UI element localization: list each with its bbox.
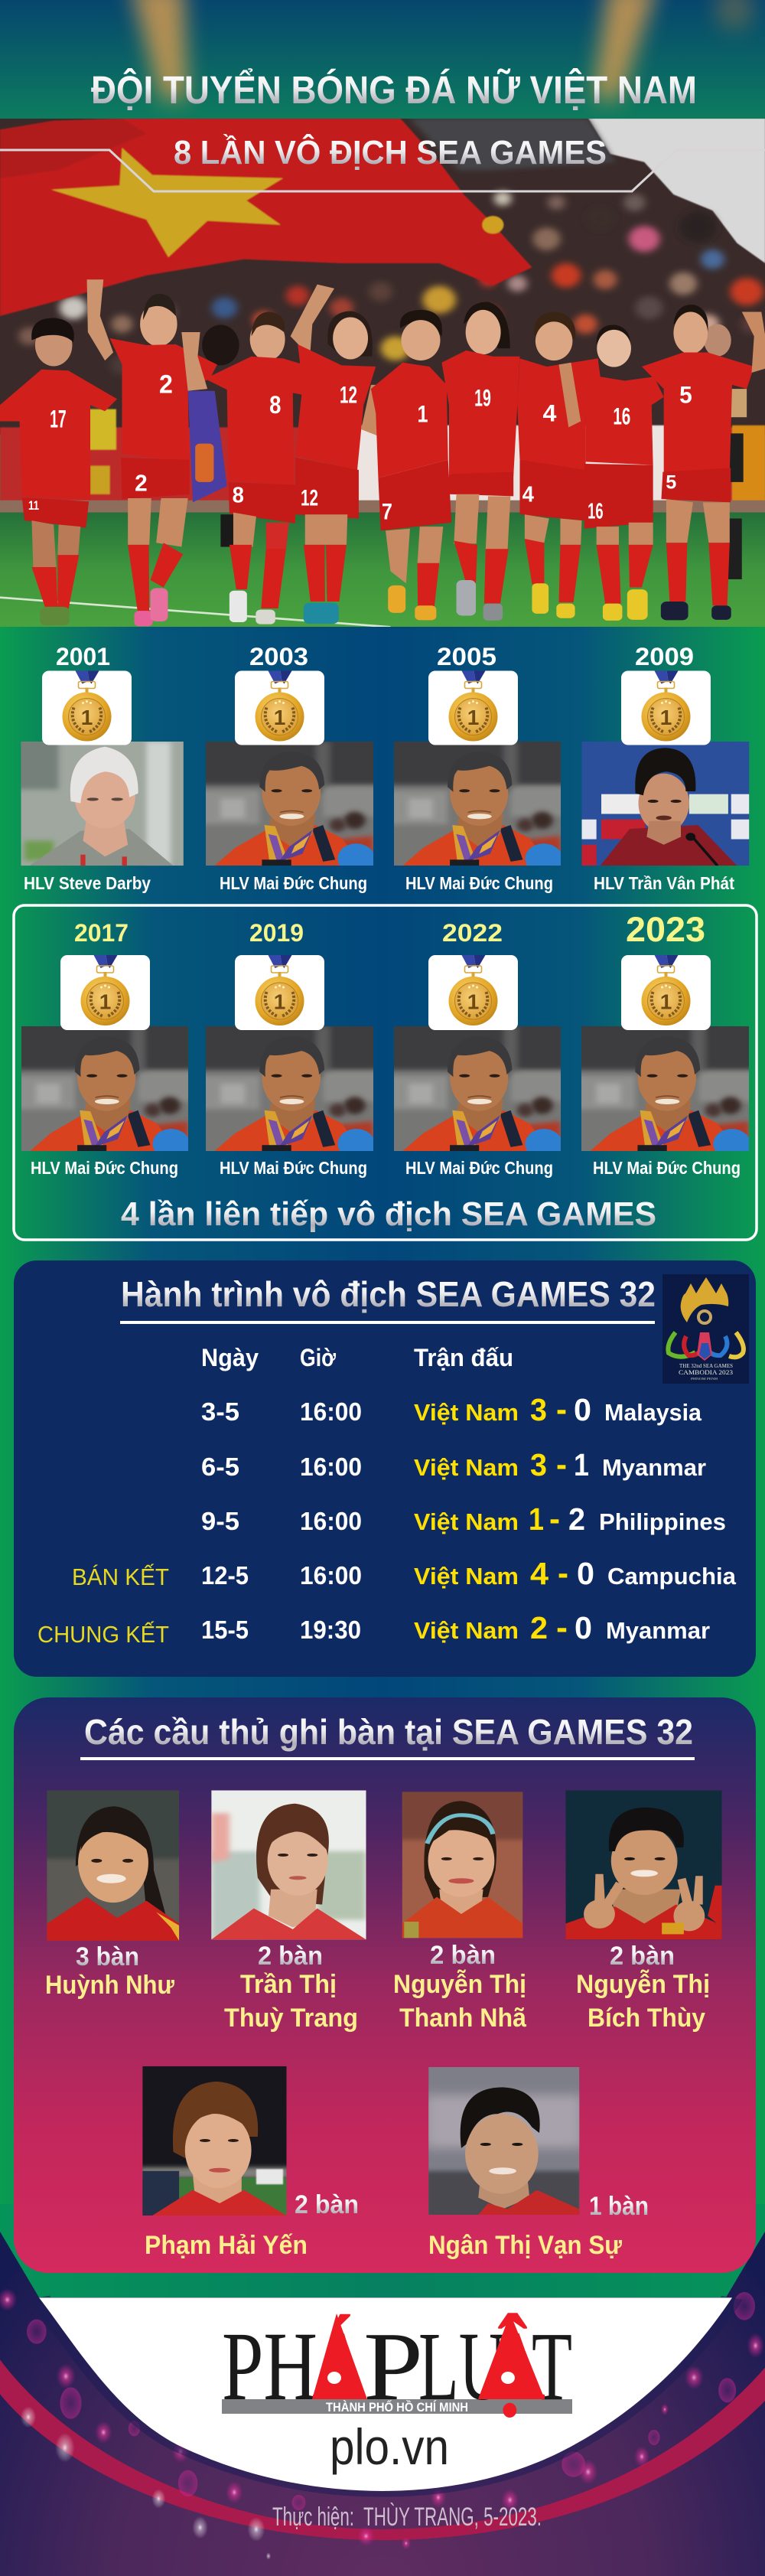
- column headers: [201, 1344, 513, 1371]
- column headers: Giờ: [300, 1344, 336, 1371]
- logo: Phap Luat: [222, 2311, 572, 2421]
- scorer: Nguyen Thi Thanh Nha: [393, 1941, 526, 2033]
- match row 3: 2: [568, 1502, 585, 1537]
- coach photo 2017: [11, 1019, 198, 1159]
- scorer: Ngan Thi Van Su: Ngân Thị Vạn Sự: [428, 2231, 622, 2260]
- match row 1: 3: [530, 1392, 547, 1427]
- coach photo 2022: [384, 1019, 571, 1159]
- caption Mai Duc Chung: HLV Mai Đức Chung: [220, 873, 367, 893]
- year 2003: 2003: [249, 643, 308, 670]
- website: plo.vn: [330, 2418, 449, 2475]
- column headers: Trận đấu: [414, 1344, 513, 1371]
- logo: Phap Luat: P: [363, 2312, 423, 2421]
- footer artwork: [0, 2288, 765, 2560]
- match row 4: semi-final: 0: [577, 1556, 594, 1591]
- scorer: Nguyen Thi Thanh Nha: Nguyễn Thị: [393, 1970, 526, 1999]
- match row 3: -: [549, 1500, 560, 1537]
- year 2009: 2009: [635, 643, 694, 670]
- player 2: [87, 279, 217, 626]
- medal card 2023: 1: [660, 990, 672, 1013]
- scorer: Nguyen Thi Bich Thuy: Nguyễn Thị: [576, 1970, 710, 1999]
- player 12: 12: [301, 484, 318, 510]
- caption 2017: HLV Mai Đức Chung: [31, 1158, 178, 1178]
- section: coaches and titles 2001-2009: [15, 643, 749, 893]
- logo: Phap Luat: LU: [418, 2312, 506, 2421]
- year 2005: 2005: [437, 643, 496, 670]
- medal card 2005: [428, 670, 518, 745]
- scorer: Nguyen Thi Thanh Nha: Thanh Nhã: [399, 2004, 526, 2033]
- player 5: 5: [666, 471, 676, 493]
- Vietnamese flag: [0, 119, 532, 316]
- player 19: [441, 302, 519, 621]
- player 16: 16: [588, 498, 604, 523]
- player 16: 16: [613, 403, 630, 430]
- medal card 2003: [235, 670, 324, 745]
- scorer: Tran Thi Thuy Trang: Trần Thị: [240, 1970, 337, 1999]
- match row 3: 16:00: [300, 1507, 362, 1535]
- panel: four consecutive titles: [11, 905, 759, 1240]
- scorer: Tran Thi Thuy Trang: 2 bàn: [258, 1942, 323, 1971]
- year 2023: 2023: [626, 910, 705, 949]
- match row 2: Việt Nam: [414, 1454, 519, 1481]
- scorer: Huynh Nhu: Huỳnh Như: [45, 1971, 174, 2000]
- logo: Phap Luat: PH: [222, 2312, 317, 2421]
- medal card 2005: 1: [467, 706, 479, 729]
- player 8: 8: [269, 390, 281, 419]
- photo: Ngan Thi Van Su: [428, 2067, 580, 2215]
- photo: Tran Thi Thuy Trang: [211, 1790, 366, 1939]
- player 5: 5: [679, 382, 692, 409]
- match row 1: Việt Nam: [414, 1399, 519, 1426]
- scorer: Nguyen Thi Bich Thuy: 2 bàn: [610, 1942, 675, 1971]
- column headers: Ngày: [201, 1344, 259, 1371]
- logo: Phap Luat: THÀNH PHỐ HỒ CHÍ MINH: [326, 2399, 468, 2415]
- track: [0, 501, 765, 513]
- player 12: [291, 285, 376, 624]
- scorer: Nguyen Thi Bich Thuy: [576, 1942, 710, 2033]
- header curved line: [0, 150, 765, 191]
- subtitle: 8 LẦN VÔ ĐỊCH SEA GAMES: [174, 132, 607, 171]
- portrait photos: [44, 1789, 722, 2219]
- player 4: [517, 312, 601, 618]
- player 8: 8: [233, 482, 244, 507]
- match row 5: final: 15-5: [201, 1616, 249, 1644]
- logo: Phap Luat: Ậ: [480, 2311, 545, 2420]
- title: ĐỘI TUYỂN BÓNG ĐÁ NỮ VIỆT NAM: [91, 67, 697, 112]
- heading: Hành trình vô địch SEA GAMES 32: [121, 1274, 656, 1314]
- player 4: 4: [522, 481, 534, 507]
- panel heading: 4 lần liên tiếp vô địch SEA GAMES: [121, 1195, 656, 1233]
- scorer: Pham Hai Yen: [145, 2190, 359, 2260]
- match row 4: semi-final: Campuchia: [607, 1563, 737, 1590]
- match row 1: 0: [574, 1392, 591, 1427]
- scorer: Huynh Nhu: 3 bàn: [76, 1942, 139, 1971]
- match row 4: semi-final: -: [558, 1554, 568, 1592]
- medal card 2001: 1: [81, 706, 93, 729]
- match row 2: 1: [574, 1447, 589, 1482]
- caption 2019: HLV Mai Đức Chung: [220, 1158, 367, 1178]
- footer dark background: [0, 2204, 765, 2576]
- logo: Phap Luat: T: [532, 2312, 572, 2421]
- caption Steve Darby: HLV Steve Darby: [24, 873, 151, 893]
- dark halo around logo area: [39, 2297, 732, 2491]
- match row 2: -: [556, 1446, 567, 1483]
- medal card 2009: 1: [660, 706, 672, 729]
- match row 5: final: Myanmar: [606, 1617, 710, 1644]
- year 2022: 2022: [442, 919, 503, 947]
- match row 3: 1: [529, 1502, 544, 1537]
- player 7: 7: [382, 498, 392, 524]
- player 7: [361, 310, 451, 620]
- match row 2: Myanmar: [602, 1454, 706, 1481]
- match row 5: final: CHUNG KẾT: [37, 1621, 169, 1648]
- logo: SEA Games Cambodia 2023: THE 32nd SEA GAMES: [679, 1362, 733, 1369]
- scorer: Nguyen Thi Thanh Nha: 2 bàn: [430, 1941, 496, 1970]
- match row 3: 9-5: [201, 1507, 239, 1535]
- match row 1: 3-5: [201, 1397, 239, 1426]
- medal card 2022: 1: [467, 990, 479, 1013]
- coach photo: Steve Darby: [15, 738, 184, 866]
- caption Mai Duc Chung: HLV Mai Đức Chung: [405, 873, 553, 893]
- medal card 2022: [428, 955, 518, 1030]
- photo: Nguyen Thi Bich Thuy: [566, 1791, 722, 1939]
- match row 4: semi-final: [72, 1554, 737, 1592]
- coach photo: Mai Duc Chung 2005: [384, 734, 571, 873]
- match row 5: final: [37, 1609, 710, 1648]
- match row 1: Malaysia: [604, 1399, 702, 1426]
- match row 4: semi-final: 16:00: [300, 1561, 362, 1590]
- scorer: Pham Hai Yen: 2 bàn: [295, 2190, 359, 2219]
- coach photo: Tran Van Phat: [581, 742, 749, 866]
- match row 4: semi-final: Việt Nam: [414, 1563, 519, 1590]
- match row 1: [201, 1391, 702, 1428]
- match row 5: final: Việt Nam: [414, 1617, 519, 1644]
- match row 3: Philippines: [599, 1508, 726, 1535]
- coach photo 2023: [571, 1019, 759, 1159]
- logo: SEA Games Cambodia 2023: CAMBODIA 2023: [679, 1368, 733, 1376]
- heading: Các cầu thủ ghi bàn tại SEA GAMES 32: [84, 1712, 693, 1752]
- player 17: [0, 318, 117, 625]
- year 2019: 2019: [249, 919, 304, 947]
- medal card 2017: [60, 955, 150, 1030]
- player 4: 4: [542, 399, 557, 427]
- sparkles and bubbles: [0, 2288, 764, 2560]
- match row 2: [201, 1446, 706, 1483]
- match row 4: semi-final: BÁN KẾT: [72, 1564, 169, 1590]
- match row 1: 16:00: [300, 1397, 362, 1426]
- hero photo: team celebrating under the flag: [0, 119, 765, 628]
- scorer: Nguyen Thi Bich Thuy: Bích Thùy: [588, 2004, 705, 2033]
- scorer: Pham Hai Yen: Phạm Hải Yến: [145, 2231, 308, 2260]
- medal card 2009: [621, 670, 711, 745]
- caption 2023: HLV Mai Đức Chung: [593, 1158, 741, 1178]
- credit: Thực hiện: THÙY TRANG, 5-2023.: [272, 2503, 542, 2532]
- logo: SEA Games Cambodia 2023: [662, 1274, 749, 1384]
- player 17: 17: [50, 405, 67, 433]
- logo: Phap Luat: Á: [312, 2311, 366, 2420]
- scorer: Huynh Nhu: [45, 1942, 174, 2000]
- year 2017: 2017: [74, 919, 129, 947]
- panel: goal scorers: [14, 1697, 756, 2273]
- player 5: [642, 305, 765, 620]
- scorer: Tran Thi Thuy Trang: [224, 1942, 358, 2033]
- white logo area: [39, 2297, 732, 2491]
- match row 3: [201, 1500, 726, 1537]
- advertising boards: [0, 409, 765, 504]
- player 19: 19: [474, 384, 491, 412]
- player 2: 2: [135, 470, 148, 497]
- coach photo 2019: [196, 1019, 383, 1159]
- player 7: 1: [417, 401, 428, 428]
- medal card 2003: 1: [274, 706, 285, 729]
- player 12: 12: [340, 382, 357, 409]
- match row 2: 3: [530, 1447, 547, 1482]
- red curved band: [0, 2359, 765, 2540]
- crowd background: [0, 119, 765, 434]
- scorer: Ngan Thi Van Su: [428, 2192, 649, 2260]
- medal card 2023: [621, 955, 711, 1030]
- photo: Pham Hai Yen: [142, 2066, 286, 2216]
- match row 4: semi-final: 4: [530, 1556, 549, 1591]
- header background with stage lights: [0, 0, 765, 119]
- background: goalkeeper and referee: [188, 324, 747, 579]
- year 2001: 2001: [56, 643, 110, 670]
- caption Tran Van Phat: HLV Trần Vân Phát: [594, 873, 734, 893]
- caption 2022: HLV Mai Đức Chung: [405, 1158, 553, 1178]
- medal card 2019: 1: [274, 990, 285, 1013]
- match row 3: Việt Nam: [414, 1508, 519, 1535]
- player 17: 11: [28, 498, 39, 512]
- scorer: Tran Thi Thuy Trang: Thuỳ Trang: [224, 2004, 358, 2033]
- pitch: [0, 513, 765, 628]
- logo: SEA Games Cambodia 2023: PHNOM PENH: [691, 1377, 718, 1381]
- player 16: [559, 324, 664, 621]
- photo: Nguyen Thi Thanh Nha: [402, 1792, 523, 1938]
- match row 2: 16:00: [300, 1453, 362, 1481]
- match row 5: final: 2: [530, 1610, 548, 1645]
- scorer: Ngan Thi Van Su: 1 bàn: [589, 2192, 649, 2221]
- medal card 2001: [42, 670, 132, 745]
- player 8: [181, 312, 304, 624]
- medal card 2017: 1: [99, 990, 111, 1013]
- match row 5: final: 0: [575, 1610, 592, 1645]
- match row 2: 6-5: [201, 1453, 239, 1481]
- player 2: 2: [159, 370, 173, 399]
- match row 4: semi-final: 12-5: [201, 1561, 249, 1590]
- match row 5: final: -: [556, 1609, 568, 1646]
- match row 5: final: 19:30: [300, 1616, 361, 1644]
- coach photo: Mai Duc Chung 2003: [196, 734, 383, 873]
- medal card 2019: [235, 955, 324, 1030]
- photo: Huynh Nhu: [47, 1791, 179, 1941]
- panel: SEA Games 32 match schedule: [14, 1260, 756, 1677]
- match row 1: -: [556, 1391, 567, 1428]
